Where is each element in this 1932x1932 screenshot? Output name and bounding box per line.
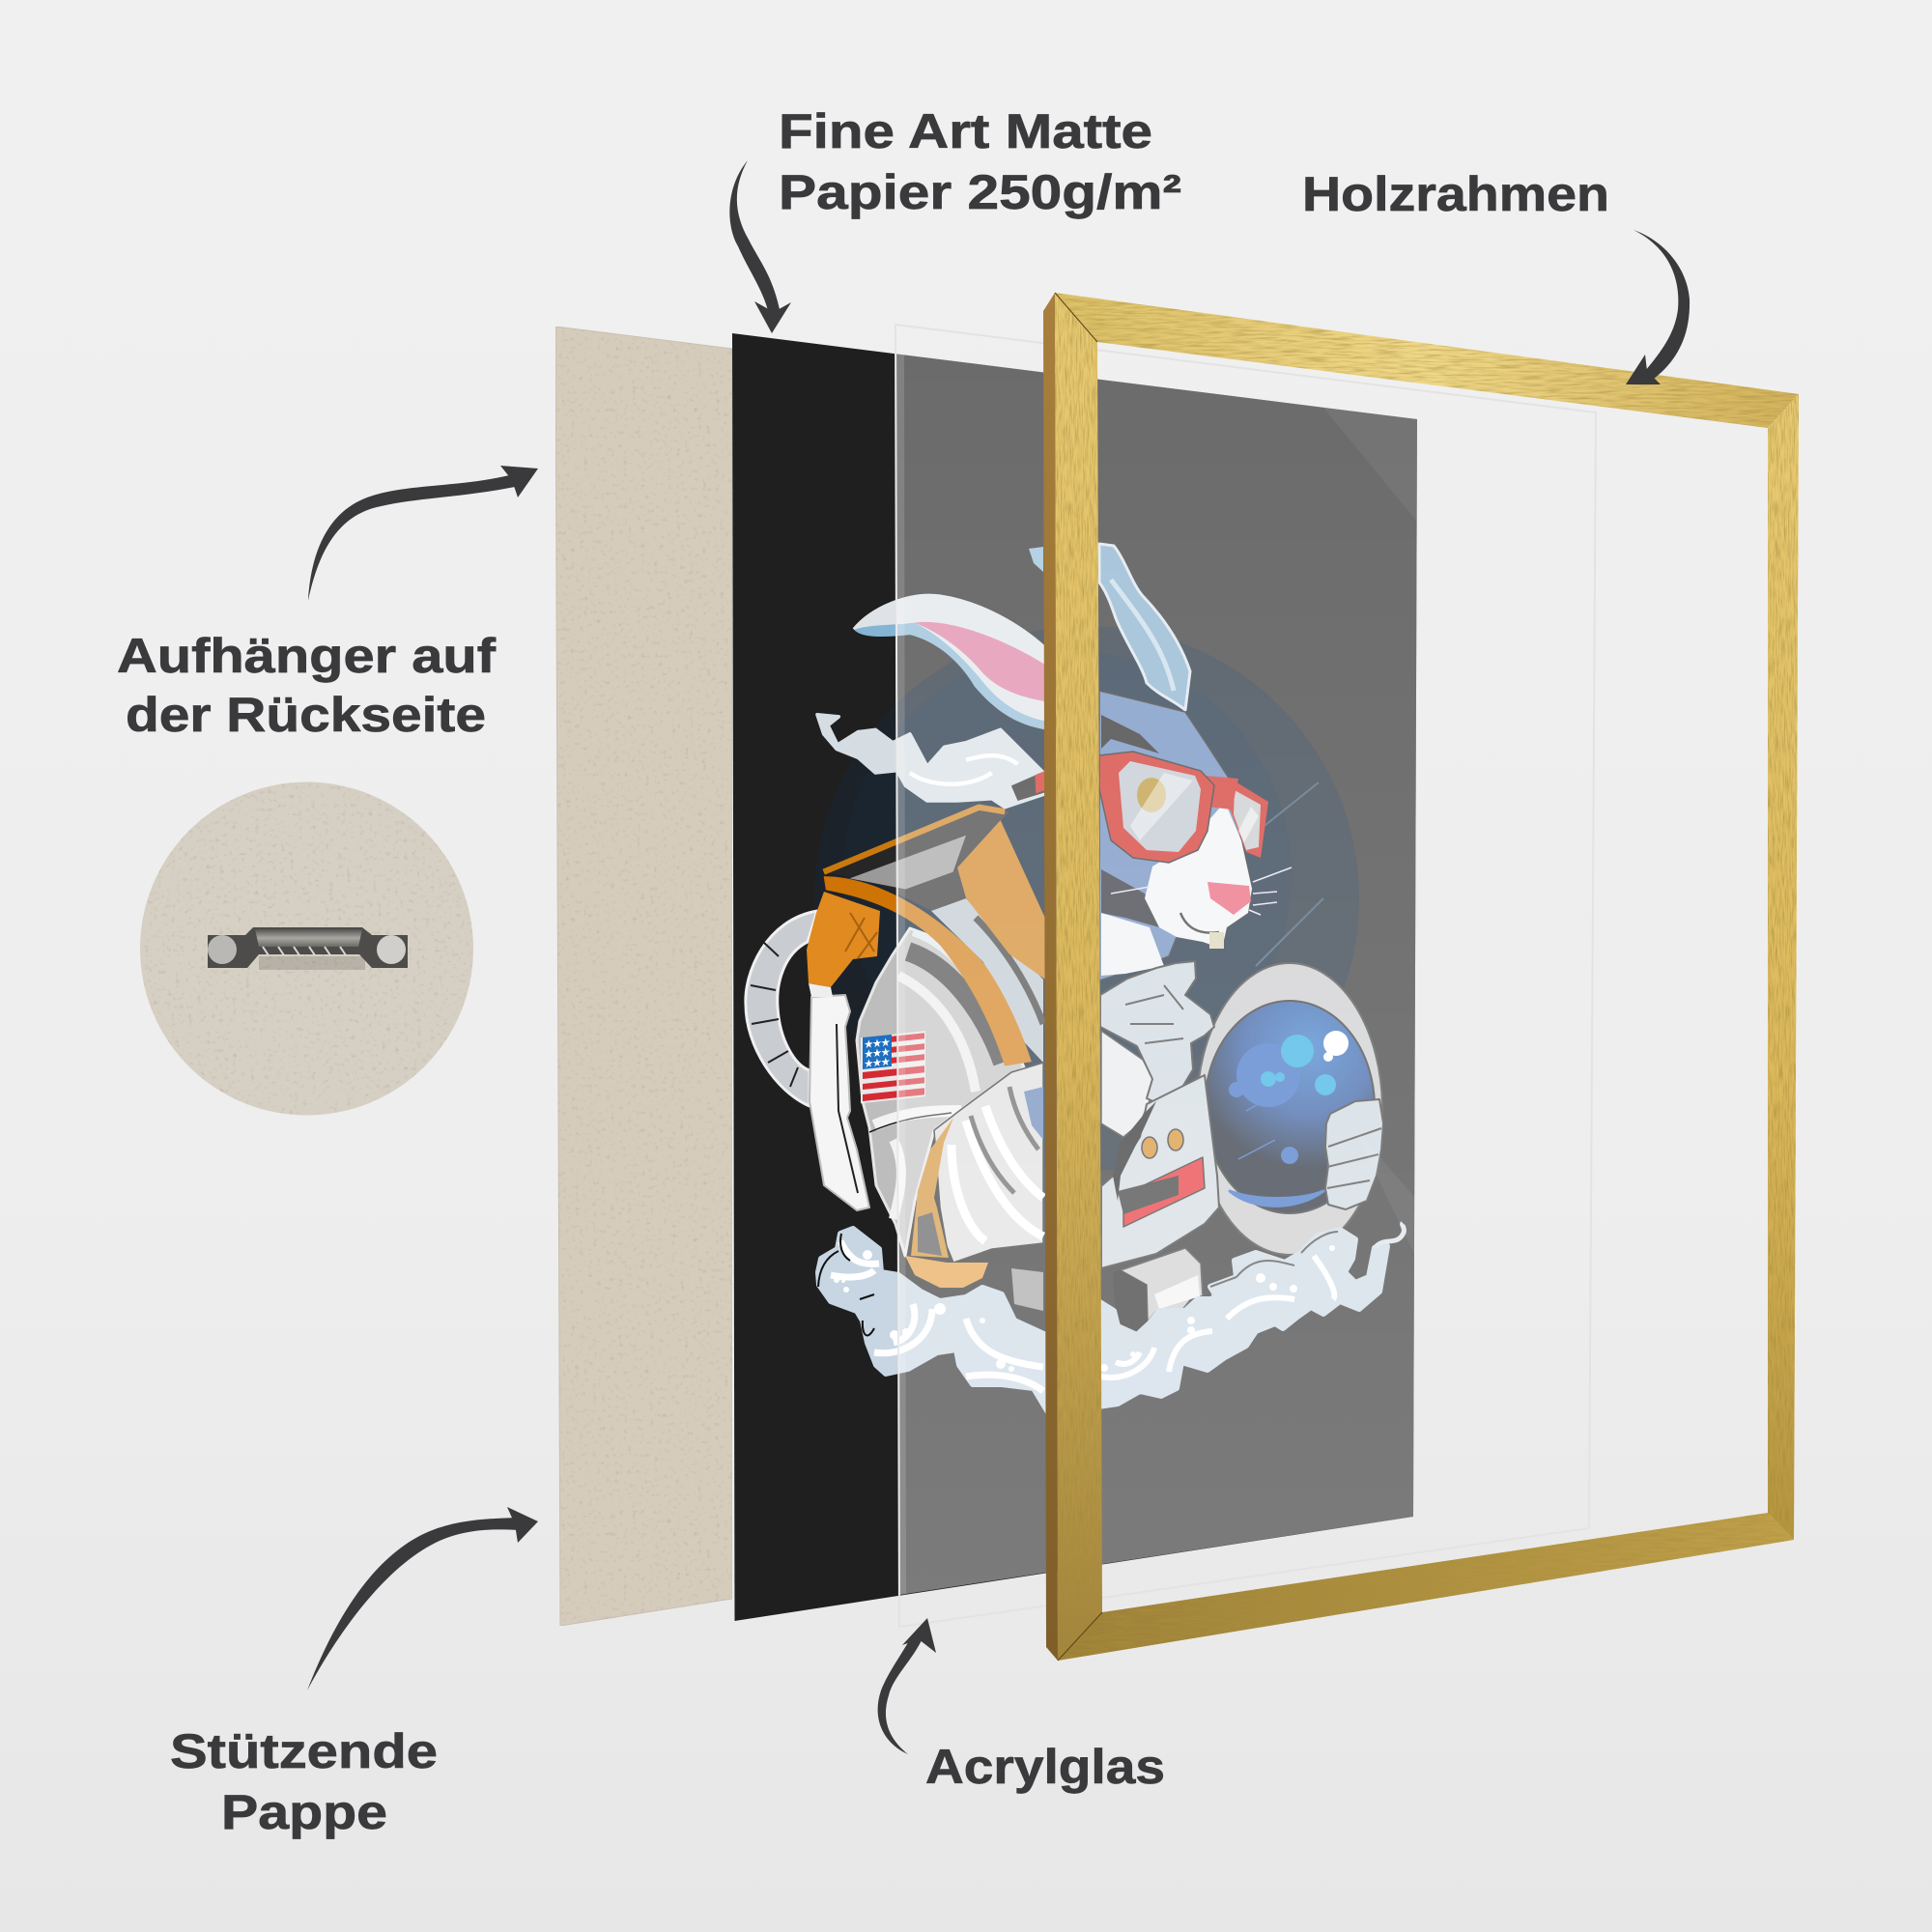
smoke cloud right — [1098, 1223, 1404, 1406]
glass edge highlight — [895, 354, 906, 1595]
panel: acrylic glass sheet — [895, 325, 1596, 1627]
panel: gold wooden frame — [1043, 293, 1799, 1661]
neck block — [1113, 1248, 1203, 1335]
right ear — [1029, 544, 1190, 710]
nose — [1208, 882, 1251, 915]
heading: hanger: der Rückseite — [126, 688, 486, 742]
arrow: to hanger on back — [308, 466, 538, 601]
frame top rail — [1055, 293, 1799, 428]
cigar — [1011, 771, 1046, 801]
frame bottom rail — [1058, 1513, 1794, 1661]
glass reflection bottom right — [1352, 1125, 1415, 1256]
heading: fine art paper: Fine Art Matte — [779, 104, 1152, 158]
flag patch: ★★★ — [865, 1047, 890, 1061]
arrow: to acrylic glass — [878, 1618, 936, 1754]
frame right rail — [1768, 394, 1799, 1540]
heading: hanger: Aufhänger auf — [117, 629, 496, 683]
arrow: to wooden frame — [1626, 230, 1690, 384]
arrow: to fine art paper — [729, 160, 791, 333]
suit shoulder — [857, 928, 1024, 1256]
heading: acrylic glass: Acrylglas — [925, 1740, 1165, 1794]
heading: fine art paper — [779, 104, 1181, 219]
heading: fine art paper: Papier 250g/m² — [779, 165, 1181, 219]
orange backpack — [807, 892, 880, 997]
heading: supporting cardboard: Pappe — [221, 1785, 387, 1839]
red glasses — [1099, 752, 1268, 863]
heading: wooden frame: Holzrahmen — [1302, 167, 1609, 221]
detail circle: hanger on back — [140, 782, 473, 1115]
arm orange band — [905, 1118, 988, 1288]
whiskers — [1111, 867, 1292, 915]
print sheet — [732, 333, 1417, 1621]
glass reflection top right — [1323, 408, 1417, 522]
flag patch — [861, 1031, 925, 1103]
suit shoulder stripes — [869, 932, 1012, 1219]
frame left side edge — [1043, 293, 1058, 1661]
chest fold — [1101, 1031, 1156, 1137]
backpack hose — [746, 911, 817, 1106]
acrylic tint over dark print — [895, 354, 1417, 1595]
illustration: astronaut rabbit — [746, 544, 1404, 1412]
heading: supporting cardboard: Stützende — [170, 1724, 438, 1778]
helmet — [1197, 963, 1382, 1255]
mouth and tooth — [1180, 913, 1219, 933]
fur — [1101, 715, 1159, 753]
suit chest fabric — [931, 898, 1043, 1063]
hand on helmet — [1325, 1099, 1383, 1209]
space halo behind acrylic — [897, 626, 1359, 1171]
smoke plume — [817, 715, 1046, 808]
orange strap and collar — [824, 820, 1046, 1066]
space halo on dark print — [814, 705, 896, 1041]
flag patch: ★★★ — [865, 1037, 890, 1051]
panel: cardboard backing — [555, 327, 732, 1626]
hanger plate — [208, 927, 408, 968]
arrow: to supporting cardboard — [307, 1507, 538, 1690]
chest unit — [1101, 1075, 1219, 1268]
head — [1099, 691, 1252, 980]
heading: supporting cardboard — [170, 1724, 438, 1839]
face — [1145, 802, 1252, 949]
hand on chin — [1100, 961, 1214, 1104]
shoulder strap wedge — [824, 808, 1009, 911]
smoke cloud left — [818, 1229, 1048, 1412]
hanger shadow — [259, 956, 365, 970]
frame left rail — [1055, 293, 1102, 1661]
rivets — [208, 935, 237, 964]
left ear — [852, 593, 1046, 729]
lower fabric hatch — [1011, 1268, 1043, 1311]
cardboard circle — [140, 782, 473, 1115]
heading: hanger — [117, 629, 496, 742]
flag patch: ★★★ — [865, 1057, 890, 1070]
arm sleeve — [934, 1063, 1043, 1263]
white backpack column — [810, 995, 869, 1210]
panel: fine art print with illustration — [732, 333, 1417, 1621]
hanger teeth — [263, 947, 346, 955]
